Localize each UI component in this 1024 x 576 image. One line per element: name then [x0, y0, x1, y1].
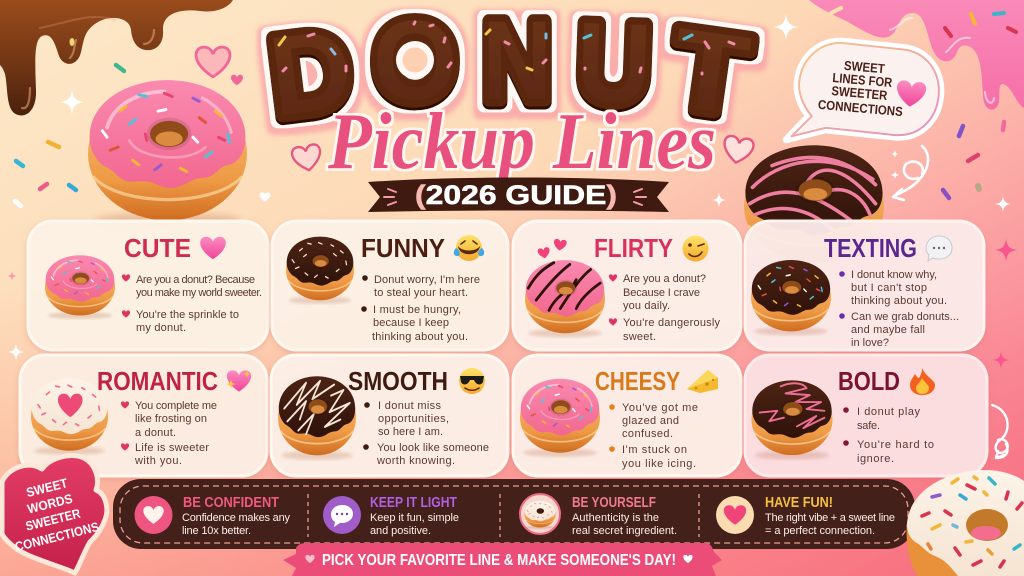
badge: sweet words heart: CONNECTIONS — [13, 519, 101, 554]
chocolate drip top left — [0, 0, 233, 115]
text: texting lines: but I can't stop — [851, 282, 927, 294]
tip: be yourself: real secret ingredient. — [572, 525, 677, 537]
icon: big pink donut — [88, 80, 247, 228]
title: DONUT — [263, 0, 756, 139]
text: smooth lines: so here I am. — [378, 426, 443, 438]
icon: winking emoji — [682, 236, 708, 262]
icon: speech bubble emoji — [926, 236, 952, 261]
icon: cheese wedge — [687, 370, 718, 393]
heading: texting: TEXTING — [824, 233, 917, 263]
speech bubble: sweet lines: SWEET — [843, 58, 886, 76]
text: cute lines — [122, 274, 262, 334]
title: DONUT: T — [664, 4, 756, 138]
text: texting lines: I donut know why, — [851, 269, 937, 281]
badge: sweet words heart: SWEETER — [24, 505, 82, 534]
panel: cheesy — [513, 355, 741, 476]
heading: bold: BOLD — [838, 366, 900, 396]
tip: be yourself: BE YOURSELF — [572, 495, 656, 511]
banner: call to action: PICK YOUR FAVORITE LINE & MAKE SOMEONE'S DAY! — [322, 552, 676, 569]
icon: chocolate donut with pink drizzle — [744, 145, 884, 269]
icon: chocolate donut with colored sprinkles — [751, 260, 831, 336]
panel: funny — [272, 221, 508, 350]
badge: sweet words heart: SWEET — [25, 475, 69, 500]
text: funny lines: because I keep — [373, 317, 449, 329]
icon: pink sprinkle donut — [45, 255, 115, 319]
panel: flirty — [513, 221, 741, 350]
text: cute lines: my donut. — [136, 322, 186, 334]
banner: call to action — [283, 543, 722, 576]
text: romantic lines: with you. — [134, 455, 182, 467]
tip: be confident — [134, 495, 290, 537]
text: texting lines: and maybe fall — [851, 324, 925, 336]
text: romantic lines — [121, 400, 217, 467]
panel: bold — [745, 355, 987, 476]
heading: romantic: ROMANTIC — [97, 366, 218, 396]
tip: have fun: = a perfect connection. — [765, 525, 875, 537]
heading: flirty: FLIRTY — [594, 233, 673, 263]
text: flirty lines — [609, 273, 720, 343]
tip: be yourself: Authenticity is the — [572, 512, 659, 524]
panel: cute — [28, 221, 268, 350]
text: bold lines: I donut play — [857, 406, 920, 418]
tip: have fun — [716, 495, 895, 537]
ribbon: 2026 guide: (2026 GUIDE ) — [415, 180, 617, 210]
text: romantic lines: Life is sweeter — [135, 442, 209, 454]
tip: be confident: line 10x better. — [182, 525, 251, 537]
title: DONUT: O — [373, 0, 457, 123]
icon: sunglasses emoji — [459, 368, 485, 394]
text: funny lines: thinking about you. — [372, 331, 468, 343]
sprinkles on pink icing — [831, 8, 1016, 36]
title: DONUT: D — [263, 6, 359, 139]
badge: sweet words heart — [2, 456, 107, 573]
tip: be yourself — [520, 494, 677, 537]
speech bubble: sweet lines: LINES FOR — [832, 70, 893, 90]
tip: be confident: BE CONFIDENT — [183, 495, 279, 511]
text: cheesy lines: confused. — [622, 428, 673, 440]
heading: smooth: SMOOTH — [348, 366, 448, 396]
title: Pickup Lines: Pickup Lines — [327, 98, 716, 186]
text: funny lines: to steal your heart. — [374, 287, 468, 299]
text: bold lines: ignore. — [857, 453, 894, 465]
panel: smooth — [271, 355, 508, 476]
speech bubble: sweet lines: CONNECTIONS — [817, 97, 904, 119]
scattered sprinkles — [15, 65, 1004, 206]
ribbon: 2026 guide — [368, 178, 669, 212]
text: smooth lines: worth knowing. — [376, 455, 455, 467]
text: flirty lines: sweet. — [623, 331, 656, 343]
tip: be confident: Confidence makes any — [182, 512, 290, 524]
tip: have fun: HAVE FUN! — [765, 495, 833, 511]
text: bold lines: You're hard to — [857, 439, 934, 451]
text: flirty lines: Are you a donut? — [623, 273, 706, 285]
text: smooth lines: You look like someone — [377, 442, 489, 454]
text: funny lines — [361, 274, 480, 343]
text: smooth lines — [363, 400, 489, 467]
text: funny lines: I must be hungry, — [373, 304, 461, 316]
text: cute lines: you make my world sweeter. — [136, 287, 262, 299]
icon: pink donut — [520, 379, 600, 457]
text: funny lines: Donut worry, I'm here — [374, 274, 480, 286]
text: flirty lines: You're dangerously — [623, 317, 720, 329]
tip: keep it light: KEEP IT LIGHT — [370, 495, 457, 511]
icon: sparkling heart — [226, 370, 251, 392]
text: cheesy lines: You've got me — [622, 402, 698, 414]
text: bold lines — [843, 406, 934, 465]
icon: curly arrow top right — [893, 146, 928, 200]
text: smooth lines: opportunities, — [378, 413, 449, 425]
icon: chocolate donut with pink drizzle — [752, 380, 832, 460]
text: texting lines: thinking about you. — [851, 295, 947, 307]
icon: chocolate donut with white drizzle — [278, 376, 356, 460]
heading: cheesy: CHEESY — [595, 366, 680, 396]
tip: keep it light: Keep it fun, simple — [370, 512, 459, 524]
text: flirty lines: Because I crave — [623, 287, 700, 299]
panel: tips bar — [113, 479, 915, 549]
text: romantic lines: like frosting on — [135, 413, 207, 425]
icon: pink donut with chocolate stripes — [525, 260, 605, 338]
title: DONUT: N — [482, 0, 552, 124]
icon: chocolate sprinkle donut — [286, 237, 354, 304]
decorative hearts and sparkles — [7, 14, 1018, 368]
text: texting lines: in love? — [851, 337, 889, 349]
text: romantic lines: You complete me — [135, 400, 217, 412]
speech bubble: sweet lines: SWEETER — [831, 83, 888, 103]
icon: pink heart — [200, 237, 226, 259]
text: texting lines — [839, 269, 959, 349]
pink icing drip top right — [809, 0, 1024, 110]
text: cheesy lines: you like icing. — [622, 458, 696, 470]
icon: white donut with heart — [31, 379, 108, 455]
text: cheesy lines: I'm stuck on — [622, 444, 687, 456]
heading: funny: FUNNY — [361, 233, 445, 263]
text: texting lines: Can we grab donuts... — [851, 311, 959, 323]
tip: keep it light — [323, 495, 459, 537]
title: DONUT: U — [575, 0, 653, 126]
icon: fire emoji — [910, 368, 935, 395]
text: cheesy lines — [609, 402, 698, 470]
text: flirty lines: you daily. — [623, 300, 670, 312]
tip: have fun: The right vibe + a sweet line — [765, 512, 895, 524]
icon: white sprinkle donut — [907, 470, 1024, 576]
heading: cute: CUTE — [124, 233, 191, 263]
tip: keep it light: and positive. — [370, 525, 431, 537]
icon: curly arrow right — [992, 405, 1008, 458]
text: romantic lines: a donut. — [135, 427, 176, 439]
panel: texting — [745, 221, 984, 350]
text: bold lines: safe. — [857, 420, 880, 432]
icon: laughing emoji — [454, 235, 484, 261]
panel: romantic — [20, 355, 267, 476]
icon: two hearts — [537, 239, 567, 259]
text: cute lines: You're the sprinkle to — [136, 309, 239, 321]
speech bubble: sweet lines — [786, 36, 945, 155]
text: cute lines: Are you a donut? Because — [136, 274, 255, 286]
badge: sweet words heart: WORDS — [26, 491, 74, 516]
text: smooth lines: I donut miss — [378, 400, 442, 412]
text: cheesy lines: glazed and — [622, 415, 679, 427]
